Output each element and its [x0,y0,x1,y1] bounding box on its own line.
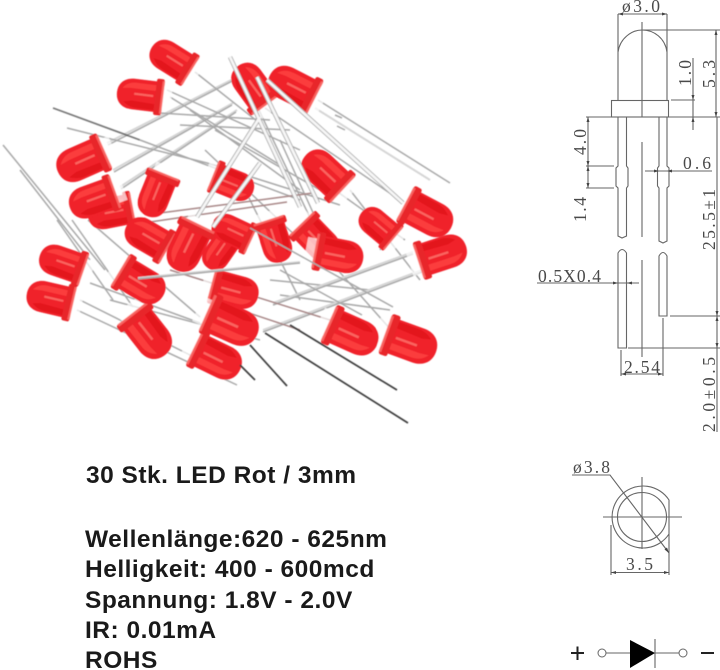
LED top view drawing: ø3.8 [573,457,610,477]
diode symbol [571,639,714,668]
LED side view dimension drawing: 2.54 [624,357,660,377]
front wires [138,57,408,423]
LED top view drawing: 3.5 [626,554,653,574]
back row LEDs [85,189,410,315]
LED side view dimension drawing: 0.6 [683,153,711,173]
lens and flange outline [618,30,667,100]
LED side view dimension drawing: 2.0±0.5 [699,357,719,432]
extension and dimension lines [537,14,720,432]
LED top view drawing [572,457,682,575]
front row LEDs [23,32,472,388]
LED side view dimension drawing: 5.3 [699,60,719,88]
specifications text: Wellenlänge:620 - 625nm [85,526,387,553]
specifications text: IR: 0.01mA [85,617,217,644]
specifications text [85,526,387,670]
LED side view dimension drawing [537,0,720,432]
specifications text: Helligkeit: 400 - 600mcd [85,556,375,583]
back wires [3,70,450,385]
LED side view dimension drawing: 25.5±1 [699,189,719,250]
heading: 30 Stk. LED Rot / 3mm [86,462,357,489]
LED side view dimension drawing: 1.0 [675,60,695,86]
centre line [641,22,643,357]
LED side view dimension drawing: 1.4 [570,197,590,222]
leads [616,117,628,238]
arrowheads [586,12,718,376]
specifications text: Spannung: 1.8V - 2.0V [85,587,353,614]
LED side view dimension drawing: 4.0 [570,129,590,155]
photo: pile of red LEDs [3,32,472,423]
LED side view dimension drawing: 0.5X0.4 [538,266,601,286]
